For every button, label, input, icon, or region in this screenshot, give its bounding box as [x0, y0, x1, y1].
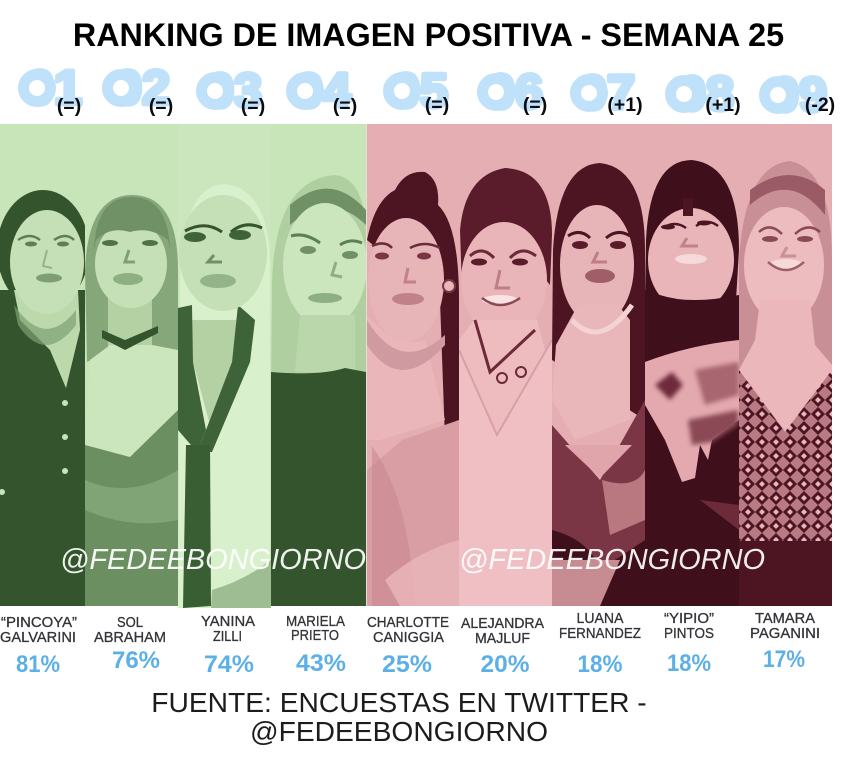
candidate names: “PINCOYA” [1, 614, 77, 631]
panel: portrait 7 Fernandez [552, 124, 645, 606]
source note: FUENTE: ENCUESTAS EN TWITTER - [151, 686, 647, 718]
percentages: 18% [578, 651, 623, 678]
position changes: (=) [149, 95, 173, 117]
candidate names: PAGANINI [750, 625, 820, 642]
percentages: 20% [480, 651, 530, 678]
candidate names: SOL [117, 614, 143, 631]
panel: portrait 5 Caniggia [367, 124, 459, 606]
position changes: (=) [57, 95, 81, 117]
rank numbers: 01 [26, 61, 82, 115]
rank numbers: 08 [678, 67, 734, 121]
position changes [57, 94, 835, 117]
position changes: (+1) [607, 94, 643, 116]
position changes: (=) [523, 94, 547, 116]
candidate names: PRIETO [291, 627, 339, 644]
candidate names: ALEJANDRA [461, 615, 544, 632]
rank numbers: 04 [295, 64, 352, 118]
title: RANKING DE IMAGEN POSITIVA - SEMANA 25 [73, 17, 784, 53]
percentages: 17% [763, 646, 805, 673]
candidate names: CHARLOTTE [367, 614, 449, 631]
panel: portrait 8 Pintos [645, 124, 739, 606]
source note: @FEDEEBONGIORNO [250, 715, 548, 747]
rank numbers: 05 [392, 64, 448, 118]
candidate names: MARIELA [286, 613, 345, 630]
source note [151, 686, 647, 747]
candidate names: YANINA [201, 613, 255, 630]
candidate names: LUANA [576, 610, 624, 627]
percentages: 74% [204, 651, 254, 678]
panel: portrait 2 Abraham [85, 124, 178, 606]
position changes: (=) [241, 95, 265, 117]
candidate names: ABRAHAM [94, 629, 166, 646]
candidate names: MAJLUF [475, 630, 530, 647]
position changes: (+1) [705, 94, 741, 116]
candidate names: ZILLI [213, 628, 242, 645]
percentages: 18% [667, 650, 711, 677]
candidate names: FERNANDEZ [559, 625, 641, 642]
percentages: 43% [296, 650, 346, 677]
position changes: (=) [333, 95, 357, 117]
panel: portrait 1 Galvarini [0, 124, 89, 606]
candidate names [0, 610, 820, 647]
percentages [16, 646, 805, 678]
watermark right: @FEDEEBONGIORNO [459, 544, 765, 576]
position changes: (=) [425, 94, 449, 116]
percentages: 81% [16, 651, 60, 678]
panel: portrait 4 Prieto [271, 124, 367, 606]
watermark left: @FEDEEBONGIORNO [60, 544, 366, 576]
panel: portrait 3 Zilli [178, 124, 271, 608]
rank numbers: 06 [487, 65, 543, 119]
panel: portrait 9 Paganini [739, 124, 832, 606]
divider strip [366, 124, 367, 606]
candidate names: “YIPIO” [664, 610, 714, 627]
percentages: 25% [382, 651, 432, 678]
position changes: (-2) [805, 94, 835, 116]
candidate names: CANIGGIA [373, 629, 444, 646]
candidate names: PINTOS [664, 625, 714, 642]
rank numbers [24, 61, 827, 122]
panel: portrait 6 Majluf [459, 124, 552, 606]
rank numbers: 02 [114, 61, 170, 115]
candidate names: GALVARINI [0, 629, 76, 646]
rank numbers: 07 [579, 66, 635, 120]
percentages: 76% [112, 647, 160, 674]
candidate names: TAMARA [755, 610, 815, 627]
rank numbers: 03 [206, 64, 262, 118]
rank numbers: 09 [771, 68, 827, 122]
